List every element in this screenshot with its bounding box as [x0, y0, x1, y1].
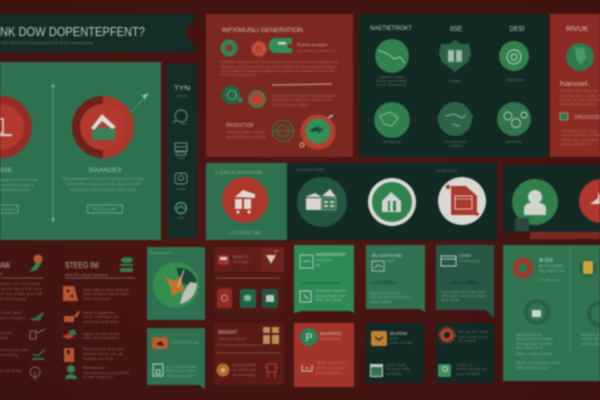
panel: icon sidebar: loop: [178, 216, 184, 220]
panel: green chart card: [147, 247, 205, 320]
panel: large green card: short list: [581, 337, 600, 341]
panel: red generation: PRODUCTION: [226, 123, 253, 129]
title banner: how does your independent work fit the market today: [1, 41, 93, 45]
column: left list: goals: [0, 331, 12, 335]
text: left label: people look into each detail: [0, 178, 38, 182]
panel: dark icon grid: business: [445, 140, 467, 144]
column: steps list: Write it down for: [83, 311, 116, 315]
panel: dark icon grid: market notes: [378, 75, 404, 79]
panel: red right column: and keep copies: [560, 102, 596, 106]
column: left list: the: [0, 272, 3, 276]
icon: search: [173, 110, 187, 123]
column: steps list: and milestone: [83, 297, 110, 301]
panel: dark icon grid: usage: [449, 79, 461, 83]
column: steps list: Start with a clear plan for: [83, 288, 130, 292]
icon: barcode ring: [526, 301, 548, 323]
panel: dark message card: work: [386, 372, 402, 376]
icon: folder: [441, 256, 456, 266]
panel: muted green card: BLACKFRAME: [372, 253, 402, 258]
icon: orange cheese: [63, 286, 78, 301]
column: left list: Check your plan: [0, 348, 28, 352]
panel: icon sidebar: period: [177, 94, 187, 98]
panel: bright green card: pay: [316, 263, 320, 267]
column: steps list: and the other reasons: [65, 273, 108, 277]
panel: dark tools card: [436, 323, 494, 383]
panel: large green card: and stay on it: [516, 346, 542, 350]
icon: green leaf circle: [566, 43, 594, 71]
panel: icon sidebar: data: [178, 156, 184, 160]
panel: red generation: Maximum value comes from small actions repeated over time with good feedback.: [221, 65, 337, 69]
column: steps list: [62, 257, 135, 379]
column: left list: set: [0, 336, 8, 340]
panel: red generation: Outline the parts of this flow: [272, 94, 335, 98]
panel: red generation: Teams track the results and adjust each plan as the market moves ahead.: [221, 69, 335, 73]
panel: dark profile strip: [503, 165, 600, 239]
icon: chart outline: [30, 329, 45, 339]
icon: outlined chart: [300, 291, 311, 302]
icon: green jar: [240, 289, 256, 308]
column: left list: monthly: [0, 353, 18, 357]
text: savings label: small costs, steady income, clear records: [66, 182, 140, 186]
panel: dark red icons card: RISKY: [233, 255, 249, 259]
panel: green house card: CLOSING TIME: [230, 230, 262, 235]
icon: house circle: [72, 96, 134, 158]
panel: dark red notes card: Record notes: [232, 363, 256, 367]
panel: deep green card: Read widely and share ideas: [441, 290, 486, 294]
panel: icon sidebar: image: [176, 187, 186, 191]
icon: right ring: [589, 303, 600, 325]
column: left list: client has a full view: [0, 287, 43, 291]
icon: red photo: [218, 255, 229, 265]
panel: muted green card: tips: [387, 259, 395, 263]
column: left list: Look after: [0, 311, 23, 315]
text: left label: every small cost adds up: [0, 183, 34, 187]
icon: green tick: [32, 349, 45, 360]
column: steps list: and share with team: [83, 320, 119, 324]
icon: red cog: [248, 90, 266, 108]
panel: red generation: to the next step.: [272, 103, 310, 107]
panel: deep green card: Community: [459, 259, 480, 263]
panel: green chart card: Breakdown: [150, 251, 171, 255]
icon: green stack: [120, 257, 133, 272]
panel: green details card: [147, 328, 205, 389]
panel: dark message card: pay: [390, 336, 398, 340]
panel: large green card: through the months: [516, 342, 552, 346]
panel: muted green card: and keep it simple for: [370, 295, 411, 299]
text: left label: and ready for more: [0, 188, 30, 192]
panel: large green card: BE TO FLEXIBLE: [539, 264, 564, 268]
panel: deep green card: with each other for advice: [441, 294, 486, 298]
column: steps list: Remember: [83, 366, 106, 370]
panel: dark tools card: Join a: [456, 363, 472, 367]
column: steps list: further on this: [83, 357, 113, 361]
panel: large green card: the right mix: [539, 269, 565, 273]
panel: dark icon grid: steps: [383, 140, 401, 144]
icon: green letter circle: P: [305, 332, 313, 344]
column: steps list: income before you go: [83, 352, 123, 356]
panel: bright green card: the tax year: [316, 298, 343, 302]
icon: storefront circle: [297, 177, 347, 227]
icon: orange mail: [371, 331, 387, 346]
panel: dark tools card: you need for it: [458, 335, 488, 339]
panel: red profile card: MANDRE: [320, 331, 342, 336]
icon: stacked boxes: [263, 327, 279, 344]
panel: red generation: and check how each step leads: [272, 98, 332, 102]
panel: green details card: client and firm: [166, 369, 196, 373]
icon: red gauge: [251, 41, 267, 57]
panel: red generation: Keep reviewing often.: [221, 73, 257, 77]
panel: muted green card: each client: [370, 300, 392, 304]
panel: green house card: 2 JOIN IN PROGRAM: [215, 170, 262, 175]
panel: green details card: FASTEST Hy: [171, 340, 200, 345]
panel: deep green card: [436, 245, 494, 318]
panel: dark tools card: at work: [458, 339, 476, 343]
column: steps list: who supports your decisions: [83, 371, 129, 375]
panel: dark icon grid: NAETIETROKT: [370, 26, 412, 32]
panel: dark message card: BURIM: [390, 331, 407, 336]
icon: red gear: [513, 258, 533, 278]
panel: dark red notes card: on each job: [232, 368, 256, 372]
panel: dark tools card: Set up the tools: [458, 330, 488, 334]
panel: dark icon grid: design tips: [506, 78, 524, 82]
icon: large green and red dial: [300, 114, 336, 150]
panel: red generation: and watch the trend: [226, 135, 266, 139]
icon: white circle red document: [438, 177, 486, 225]
panel: red generation: manage each output: [226, 130, 264, 134]
panel: bright green card: INDEPENDENT: [316, 252, 346, 257]
icon: screen: [175, 143, 187, 155]
column: left list: your margins: [0, 316, 25, 320]
icon: laptop circle: [0, 96, 32, 158]
icon: orange badge: [216, 364, 230, 376]
icon: tree outline: [30, 367, 40, 380]
panel: dark red notes card: INSIGHT:: [218, 330, 238, 336]
panel: dark tools card: peer workers: [456, 372, 480, 376]
panel: dark icon grid: local demand: [376, 83, 406, 87]
icon: dark green jar: [262, 289, 278, 308]
column: steps list: in the long run: [83, 375, 113, 379]
panel: red generation: INFXIMUNLI GENERATION: [222, 28, 303, 34]
panel: bright green card: Keep the figures: [316, 289, 346, 293]
panel: muted green card: [366, 245, 425, 312]
title banner: [0, 14, 197, 52]
icon: camera: [175, 173, 187, 184]
panel: red right column: [550, 14, 600, 157]
panel: dark message card: [366, 323, 424, 383]
panel: red profile card: work on your: [316, 366, 347, 370]
column: left list: of the costs you bill: [0, 292, 42, 296]
column: steps list: Balance your time and: [83, 347, 123, 351]
panel: large green card: [503, 245, 600, 381]
icon: green chat: [438, 364, 451, 377]
panel: deep green card: CONEW: [459, 253, 472, 258]
icon: green tag: [269, 38, 292, 53]
panel: dark icon grid: notes: [449, 144, 463, 148]
panel: red right column: every quarter to see: [561, 133, 600, 137]
column: steps list: Agree on the terms: [83, 332, 119, 336]
panel: dark icon grid: DESI: [510, 26, 525, 33]
panel: red generation: Robot analyst: [297, 43, 327, 47]
icon: map circle: [375, 39, 409, 73]
panel: bright green card: [294, 245, 354, 313]
panel: dark icon grid: links: [506, 140, 522, 144]
panel: red right column: Review your cost: [561, 129, 597, 133]
panel: large green card: Share your progress often: [516, 361, 560, 365]
icon: green person: [65, 365, 77, 379]
icon: green person circle: [512, 179, 558, 225]
text: savings label: SIAAACIES: [88, 168, 122, 174]
icon: links circle: [497, 102, 531, 136]
panel: red right column: what has changed: [561, 138, 599, 142]
icon: server badge: [439, 40, 471, 72]
icon: orange tablet: [64, 348, 74, 362]
panel: dark icon grid: IISE: [450, 26, 462, 33]
icon: browser: [370, 364, 383, 377]
icon: triangle warning: [266, 250, 278, 264]
column: steps list: with your partners: [83, 336, 119, 340]
panel: bright green card: accurate for: [316, 294, 347, 298]
icon: red robot: [265, 364, 278, 378]
panel: red right column: down for the record: [560, 98, 600, 102]
panel: dark red icons card: things: [233, 260, 249, 264]
text: left label: more: [1, 208, 15, 212]
icon: green note: [560, 113, 568, 120]
panel: dark red notes card: and budget: [232, 373, 256, 377]
panel: red profile card: Take time to: [316, 361, 344, 365]
icon: green plant: [31, 312, 44, 320]
icon: white ring house: [368, 178, 416, 226]
column: steps list: your independent path: [83, 292, 129, 296]
column: left list: Make sure that each: [0, 282, 40, 286]
panel: large green card: with advisers too: [516, 366, 548, 370]
panel: red profile card: [294, 323, 354, 387]
panel: green details card: are kept safe: [166, 374, 194, 378]
icon: orange box: [64, 311, 80, 322]
panel: red generation: [206, 14, 353, 157]
icon: flow circle: [374, 102, 410, 138]
panel: red right column: Check with all your: [560, 89, 599, 93]
column: left list: AW: [0, 261, 10, 270]
panel: icon sidebar: TYN: [174, 86, 190, 92]
panel: red right column: hanoel.: [560, 81, 590, 88]
column: left list: [0, 254, 45, 380]
panel: red right column: RIVUK: [566, 26, 588, 33]
icon: box outline: [302, 365, 312, 371]
column: left list: at all of the: [0, 369, 22, 373]
icon: target: [271, 120, 295, 142]
panel: green house card: [206, 163, 287, 240]
icon: dark green ring: [222, 86, 242, 104]
icon: orange photo: [152, 337, 168, 349]
column: left list: in your books: [0, 297, 26, 301]
icon: orange figure: [29, 254, 42, 272]
panel: green comparison: [0, 62, 161, 240]
panel: large green card: for you now: [539, 278, 559, 282]
panel: dark red icons card: [214, 247, 284, 313]
panel: dark red notes card: [214, 323, 284, 385]
text: left label: [0, 168, 38, 213]
panel: dark message card: wide to use: [390, 341, 412, 345]
icon: document outline: [153, 364, 163, 376]
arrow: growth: [131, 93, 149, 112]
icon: red jar: [217, 287, 232, 308]
column: steps list: STEEG INI: [65, 261, 99, 270]
icon: orange gear: [439, 327, 455, 343]
panel: dark message card: for your day: [386, 367, 410, 371]
panel: dark message card: Use tools: [386, 363, 406, 367]
text: savings label: [62, 168, 144, 213]
panel: dark icon strip: [287, 163, 497, 240]
panel: large green card: Apply each rule: [516, 333, 542, 337]
text: left label: ASE: [0, 168, 12, 174]
text: savings label: and look out for your next step: [70, 188, 136, 192]
icon: image frame: [372, 261, 384, 271]
icon: cycle: [176, 202, 186, 214]
panel: dark icon grid: share and review: [376, 79, 406, 83]
panel: dark red notes card: Ask your clients: [218, 337, 246, 341]
panel: icon sidebar: [167, 64, 197, 238]
icon: green and red hands: [62, 329, 77, 339]
panel: large green card: and keep to a budget: [516, 337, 552, 341]
panel: dark tools card: small group of: [456, 367, 486, 371]
panel: red right column: and adapt it: [561, 142, 591, 146]
icon: red person circle: [579, 179, 600, 223]
icon: gear circle: [499, 41, 529, 71]
icon: network circle: [436, 102, 474, 136]
panel: dark icon strip: TEMPLATES: [436, 169, 458, 173]
panel: red generation: Generation depends on clear input and steady review across each of the stages shown.: [221, 60, 339, 64]
panel: green details card: your record with: [166, 365, 196, 369]
icon: green badge: [220, 40, 238, 56]
panel: large green card: Maybe a: [581, 333, 600, 337]
panel: dark icon grid: [359, 14, 548, 157]
panel: red right column: clients and write it: [560, 94, 600, 98]
panel: deep green card: and work: [441, 298, 459, 302]
title banner: NK DOW DOPENTEPFENT?: [0, 24, 145, 39]
icon: outlined frame: [300, 255, 313, 268]
panel: icon sidebar: find: [181, 122, 187, 126]
panel: large green card: Make a note of them: [516, 352, 552, 356]
panel: bright green card: Worker: [316, 258, 333, 262]
panel: red profile card: business: [316, 371, 342, 375]
panel: red generation: steps taken and more of it: [297, 49, 336, 53]
pie chart: [153, 262, 199, 308]
icon: yellow bag: [579, 259, 597, 277]
text: savings label: Plan savings for the long term and keep the budget: [62, 177, 144, 181]
text: savings label: READ MORE: [93, 208, 118, 212]
panel: red profile card: Business: [320, 337, 341, 341]
panel: large green card: of items: [581, 342, 600, 346]
panel: dark icon strip: HOUSING STEPS: [296, 168, 325, 172]
icon: red market circle: [222, 177, 268, 223]
panel: large green card: IB ISIX: [539, 258, 554, 264]
column: steps list: future business use: [83, 315, 119, 319]
panel: muted green card: Work from a base: [370, 291, 400, 295]
